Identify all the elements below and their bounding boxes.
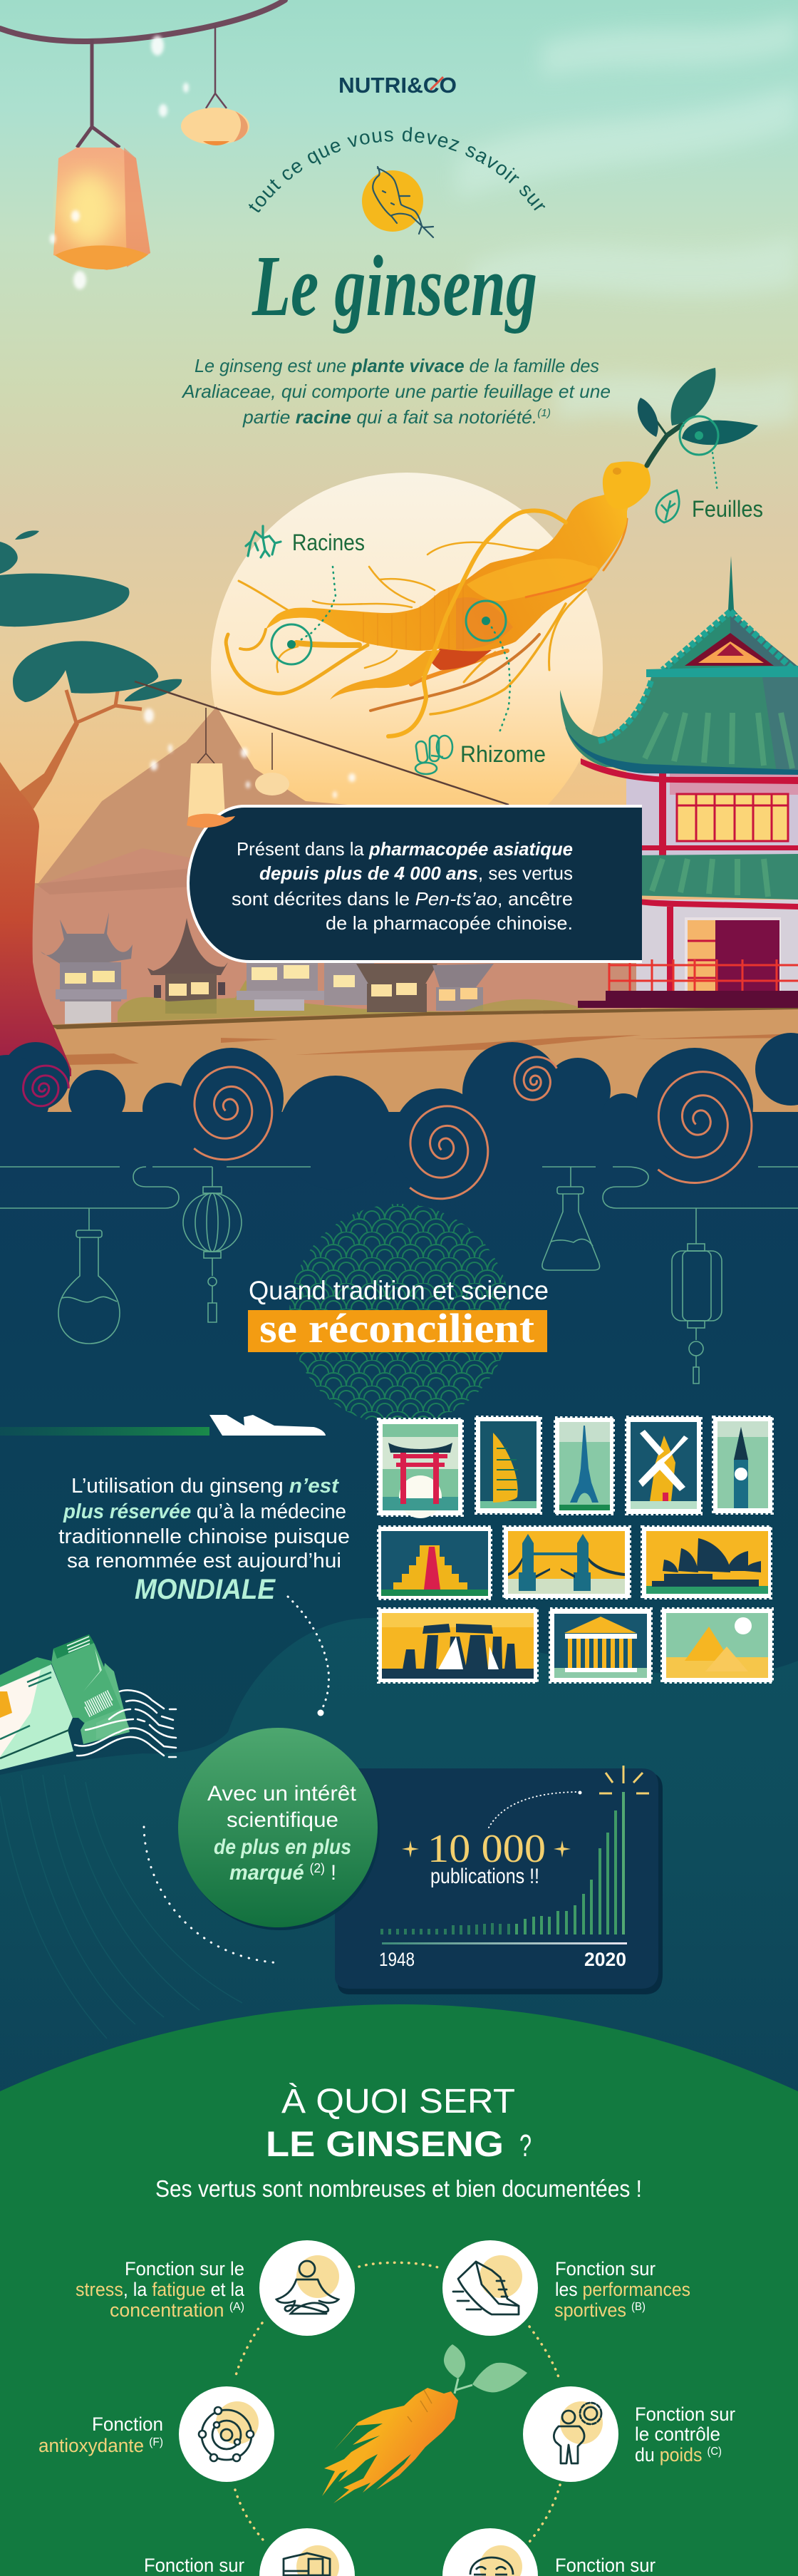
eaves [565, 727, 798, 775]
label: racines: Racines [292, 530, 365, 555]
label: du poids [635, 2444, 705, 2466]
stamp: big ben [713, 1417, 772, 1513]
spire [725, 556, 738, 614]
orange box [248, 1310, 547, 1352]
steps [578, 991, 798, 1008]
circle callout: intérêt scientifique: marqué [229, 1861, 304, 1885]
moon [211, 473, 603, 865]
circle callout: intérêt scientifique: (2) [310, 1861, 325, 1875]
dotted curve [489, 1792, 580, 1828]
text: mondiale: sa renommée est aujourd’hui [67, 1550, 341, 1572]
faint background arcs [0, 1775, 242, 2039]
left dotted arc [144, 1827, 280, 1963]
logo: Nutri&Co: NUTRI&CO [338, 73, 457, 98]
hanging branch [0, 0, 285, 41]
label: (C) [707, 2446, 722, 2458]
ginseng root body [266, 462, 651, 700]
heading: à quoi sert: LE GINSENG [266, 2124, 504, 2164]
line art: lantern 2 [672, 1208, 722, 1384]
scallop wave circle [288, 1204, 512, 1425]
dotted ring [235, 2262, 560, 2545]
stamp: ziggurat [378, 1527, 491, 1599]
text: mondiale: plus réservée qu’à la médecine [63, 1500, 346, 1523]
label: feuilles: Feuilles [692, 496, 763, 522]
heading: quand tradition [248, 1276, 549, 1352]
text panel: pharmacopée: Présent dans la pharmacopée asiatique [237, 838, 573, 860]
function: performances [442, 2240, 690, 2336]
green dome [0, 2004, 798, 2576]
road ground [0, 1005, 798, 1155]
icon: roots [246, 526, 281, 557]
label [38, 2413, 163, 2456]
icon: leaf [656, 490, 679, 522]
plane tickets [0, 1634, 130, 1770]
clouds [0, 1033, 798, 1192]
stamp: windmill [626, 1417, 701, 1514]
stars [402, 1840, 571, 1858]
bars [382, 1792, 623, 1934]
bar chart [379, 1766, 649, 1970]
label: Fonction sur [635, 2404, 735, 2425]
stamp: stonehenge [378, 1609, 537, 1682]
label: (A) [229, 2301, 244, 2313]
label: sportives [554, 2299, 626, 2321]
bar chart: publications !! [430, 1865, 539, 1888]
stamps [378, 1417, 772, 1682]
function: cut off lower right [442, 2528, 656, 2576]
mountains [0, 706, 641, 1026]
ginseng leaves [638, 368, 758, 465]
pagoda [560, 556, 798, 1008]
lantern in front of panel [187, 814, 235, 828]
house 2 [147, 918, 228, 1014]
label: Fonction [92, 2413, 163, 2435]
house 1 [41, 912, 133, 1025]
line art: frames [0, 1167, 798, 1208]
ginseng long strand [388, 510, 566, 736]
icon: meditation [259, 2240, 355, 2336]
airplane with trail [0, 1415, 326, 1436]
function: cut off lower left [144, 2528, 355, 2576]
label: les performances [555, 2279, 690, 2300]
figure: 10 000: 10 000 [428, 1827, 546, 1871]
label: Fonction sur le [125, 2258, 244, 2279]
large lantern [53, 39, 150, 270]
icon: face [442, 2528, 538, 2576]
door [685, 917, 781, 992]
circle callout: intérêt scientifique: de plus en plus [214, 1835, 351, 1859]
text panel: pharmacopée [188, 806, 642, 962]
label: Fonction sur [144, 2555, 244, 2576]
curved tagline: tout ce que vous devez savoir sur [248, 127, 546, 212]
background: sky [0, 0, 798, 1083]
label [76, 2258, 245, 2321]
text: mondiale: L’utilisation du ginseng n’est [71, 1475, 339, 1498]
callout: racines [246, 526, 365, 664]
icon: shoe [442, 2240, 538, 2336]
label: antioxydante [38, 2435, 144, 2456]
gable [656, 612, 798, 676]
floating light particles [50, 36, 356, 798]
text panel: pharmacopée: depuis plus de 4 000 ans, ses vertus [259, 862, 573, 884]
label: concentration [110, 2299, 224, 2321]
circle callout: intérêt scientifique: Avec un intérêt [207, 1782, 357, 1805]
axis [382, 1942, 627, 1944]
callout: rhizome [415, 601, 546, 774]
main roof [560, 677, 798, 772]
background mist streaks [456, 14, 798, 427]
heading: à quoi sert: ? [519, 2128, 532, 2163]
function: stress [76, 2240, 355, 2336]
circle callout: intérêt scientifique: scientifique [227, 1808, 338, 1832]
sparkle rays [599, 1766, 649, 1793]
main roof rim [646, 666, 798, 677]
function: poids [523, 2386, 735, 2482]
intro text: Araliaceae, qui comporte une partie feuillage et une [181, 381, 611, 402]
cloud spirals [23, 1049, 775, 1218]
callout: feuilles [656, 416, 763, 522]
intro text: (1) [537, 407, 551, 419]
upper walls [626, 770, 798, 859]
string lights with lanterns [135, 681, 509, 825]
axis labels: 1948 [379, 1949, 415, 1970]
text: mondiale: MONDIALE [135, 1574, 276, 1605]
section background: dark navy [0, 1140, 798, 2138]
line art: lantern 1 [183, 1167, 242, 1322]
chart card [335, 1768, 663, 1994]
window [677, 794, 788, 841]
function: antioxydante [38, 2386, 274, 2482]
text panel: pharmacopée: sont décrites dans le Pen-ts’ao, ancêtre [232, 888, 573, 910]
label: rhizome: Rhizome [460, 741, 546, 767]
label: (F) [149, 2436, 163, 2448]
intro text: partie racine qui a fait sa notoriété. [243, 406, 534, 428]
bar chart: 2020 [584, 1949, 626, 1970]
lower roof [585, 854, 798, 900]
label: Fonction sur [555, 2555, 656, 2576]
stamp: tower bridge [504, 1527, 630, 1598]
heading: quand tradition: Quand tradition et science [249, 1276, 549, 1305]
dotted connector [288, 1597, 328, 1716]
circle callout: intérêt scientifique [178, 1728, 380, 1930]
subtitle: Ses vertus sont nombreuses et bien documentées ! [155, 2175, 642, 2202]
label [635, 2404, 735, 2466]
label [554, 2258, 690, 2321]
railing [608, 959, 798, 991]
heading: à quoi sert [266, 2083, 532, 2164]
label: Fonction sur [555, 2258, 656, 2279]
text panel: pharmacopée: de la pharmacopée chinoise. [326, 912, 573, 934]
icon: shield [259, 2528, 355, 2576]
circle callout: intérêt scientifique: ! [325, 1861, 336, 1885]
house 4 [324, 962, 374, 1005]
lower wall [636, 900, 798, 992]
stamp: opera [642, 1527, 771, 1598]
ginseng rootlets [226, 519, 627, 714]
icon: atom [179, 2386, 274, 2482]
title: Le ginseng [252, 238, 537, 334]
front ticket top strip [0, 1657, 51, 1687]
icon: ginseng sketch on yellow disc [362, 167, 433, 237]
text: mondiale: traditionnelle chinoise puisque [58, 1525, 350, 1548]
stamp: burj [476, 1417, 541, 1513]
bushes [118, 980, 456, 1026]
lighter background blob [0, 1618, 798, 2138]
icon: rhizome [415, 736, 452, 774]
stamp: pyramids [662, 1609, 772, 1682]
postmark waves [75, 1690, 176, 1757]
house 5 [356, 964, 437, 1012]
central carrot [322, 2344, 527, 2503]
icon: person and gear [523, 2386, 618, 2482]
village houses [41, 912, 591, 1026]
ticket stub [51, 1634, 121, 1723]
line art: conical flask [542, 1167, 600, 1270]
stamp: torii [378, 1419, 462, 1518]
line art: round flask [58, 1208, 120, 1344]
label: (B) [631, 2301, 646, 2313]
stamp: eiffel [555, 1418, 613, 1514]
house 6 [432, 964, 494, 1011]
stamp: parthenon [550, 1609, 651, 1682]
label: stress, la fatigue et la [76, 2279, 245, 2300]
small lantern [181, 26, 249, 145]
house 3 [237, 959, 326, 1011]
back ticket [81, 1663, 130, 1744]
heading: à quoi sert: À QUOI SERT [281, 2083, 515, 2121]
heading: quand tradition: se réconcilient [259, 1305, 535, 1351]
root crown [603, 462, 651, 509]
intro text: Le ginseng est une plante vivace de la famille des [195, 355, 599, 376]
label: le contrôle [635, 2423, 720, 2445]
intro text [181, 355, 611, 428]
front ticket body [0, 1664, 73, 1770]
text: mondiale [58, 1475, 350, 1605]
tree leaves and branches [0, 530, 182, 1076]
